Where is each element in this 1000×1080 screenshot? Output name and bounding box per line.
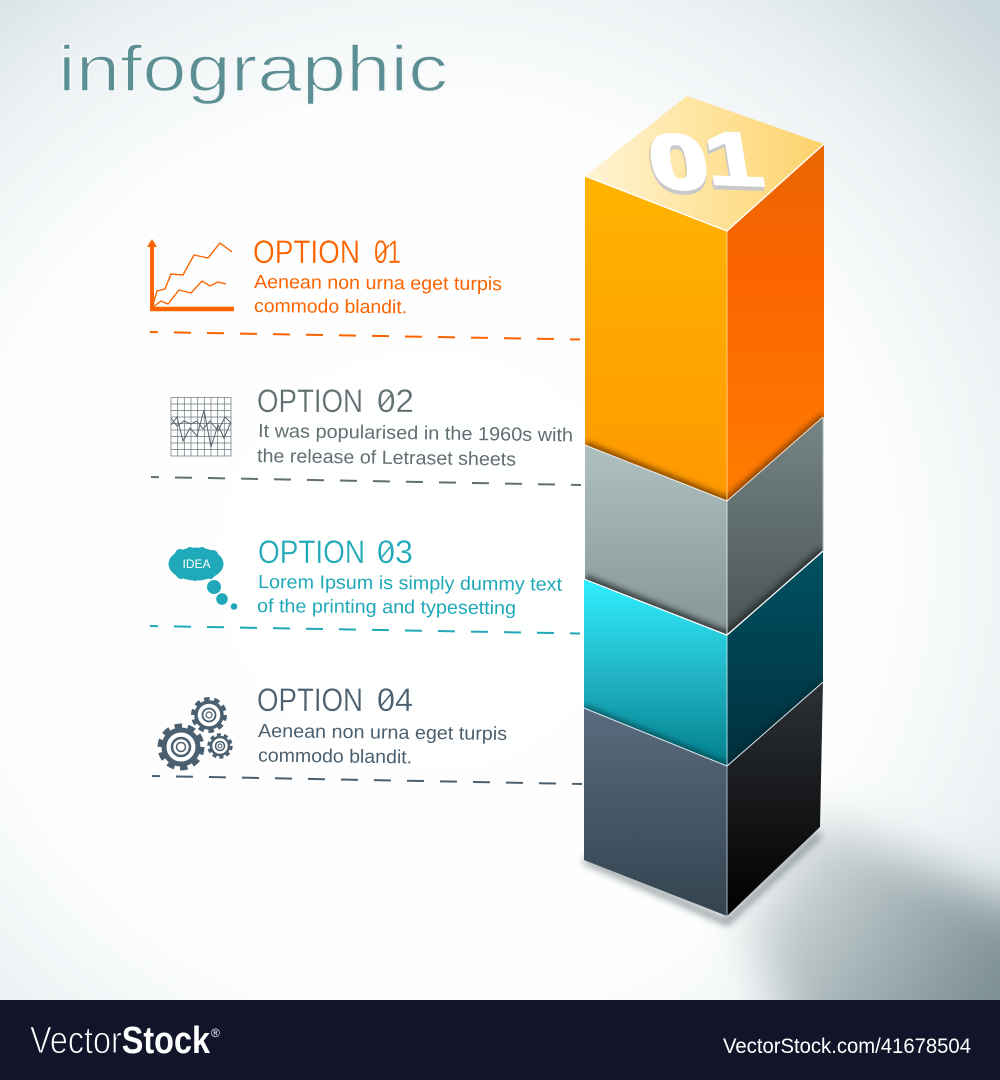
heading: option 02: OPTION (257, 383, 363, 419)
title: infographic (58, 32, 448, 105)
icon: gears (160, 699, 231, 768)
description: option 03: of the printing and typesetting (257, 596, 516, 619)
icon: line chart (147, 239, 234, 309)
description: option 02: It was popularised in the 1960s with (258, 421, 573, 446)
footer logo: VectorStock (30, 1020, 211, 1062)
number 01 on top face (641, 116, 769, 210)
heading: option 04: 04 (377, 682, 413, 718)
divider (150, 626, 580, 634)
footer bar (0, 1000, 1000, 1080)
heading: option 01: 01 (374, 234, 401, 270)
heading: option 01: OPTION (253, 234, 360, 270)
divider (150, 332, 580, 340)
description: option 01: commodo blandit. (254, 296, 407, 318)
description: option 03 (257, 572, 563, 619)
icon: grid chart (171, 398, 231, 456)
number 01 on top face: 1 (698, 116, 769, 203)
description: option 03: Lorem Ipsum is simply dummy text (258, 572, 563, 596)
description: option 01: Aenean non urna eget turpis (254, 272, 502, 295)
description: option 02: the release of Letraset sheets (257, 446, 516, 471)
option 03 (150, 534, 580, 634)
description: option 02 (257, 421, 573, 471)
block top face (585, 96, 824, 231)
heading: option 02: 02 (377, 383, 414, 419)
description: option 04 (258, 721, 507, 768)
divider (151, 477, 581, 485)
option 04 (152, 682, 582, 784)
top edge highlight (585, 144, 824, 231)
icon: idea thought bubble: IDEA (182, 557, 211, 571)
number 01 on top face: 0 (643, 123, 714, 210)
heading: option 04: OPTION (257, 682, 363, 718)
divider (152, 776, 582, 784)
heading: option 03: 03 (377, 534, 413, 570)
block: orange (585, 144, 824, 501)
description: option 01 (254, 272, 502, 318)
block: dark base (584, 682, 823, 922)
option 01 (147, 234, 580, 340)
icon: idea thought bubble (168, 547, 237, 610)
number 01 on top face: 1 (697, 120, 768, 207)
option 02 (151, 383, 581, 485)
heading: option 03: OPTION (258, 534, 365, 570)
description: option 04: commodo blandit. (258, 746, 412, 768)
floor shadow (733, 806, 1000, 1000)
block: grey (584, 417, 823, 635)
stacked 3D column (584, 96, 824, 922)
block: teal (584, 551, 823, 766)
number 01 on top face: 0 (641, 120, 712, 207)
number 01 on top face: 0 (643, 119, 714, 206)
description: option 04: Aenean non urna eget turpis (258, 721, 507, 745)
registered mark: ® (211, 1026, 220, 1040)
footer url: VectorStock.com/41678504 (723, 1035, 971, 1058)
